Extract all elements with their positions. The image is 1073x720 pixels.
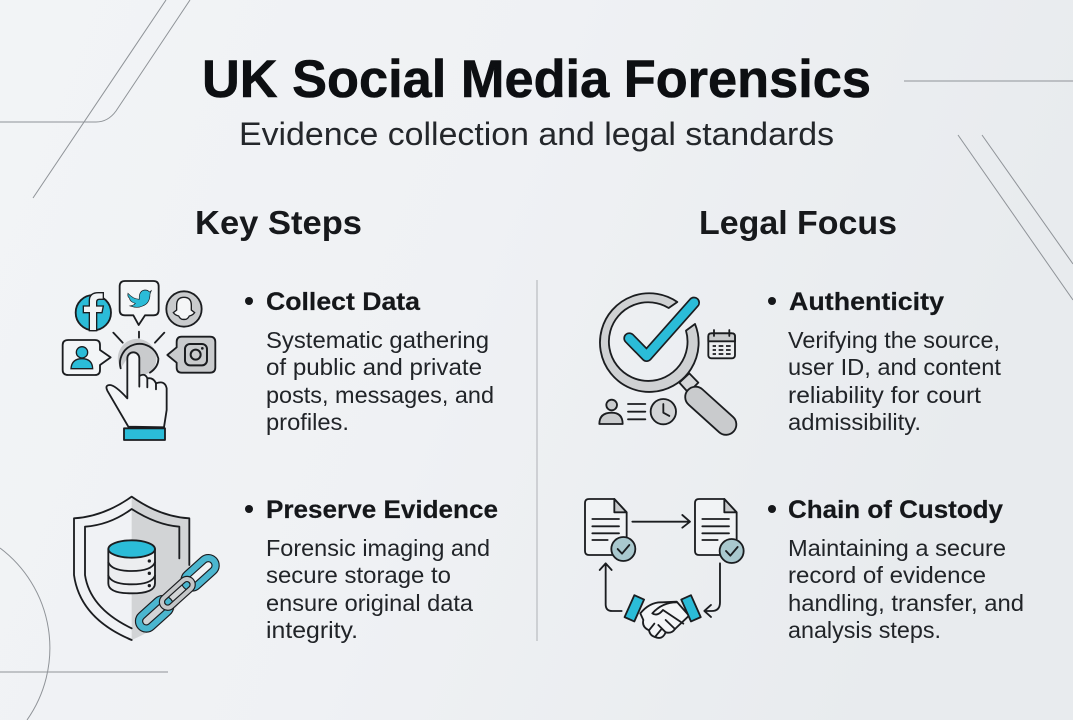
title: UK Social Media Forensics <box>202 50 871 109</box>
focus: authenticity: reliability for court <box>788 382 982 408</box>
step: collect data <box>245 288 494 435</box>
focus: authenticity: Authenticity <box>789 288 944 316</box>
focus: authenticity: Verifying the source, <box>788 327 1000 353</box>
focus: authenticity <box>768 288 1002 435</box>
step: preserve evidence: ensure original data <box>266 590 473 616</box>
step: preserve evidence <box>245 496 498 643</box>
focus: chain of custody: record of evidence <box>788 562 986 588</box>
focus: chain of custody: analysis steps. <box>788 617 941 643</box>
heading: key steps: Key Steps <box>195 204 362 241</box>
icon: shield with database and chain <box>74 497 219 640</box>
step: collect data: Collect Data <box>266 288 421 316</box>
step: preserve evidence: Preserve Evidence <box>266 496 498 524</box>
subtitle: Evidence collection and legal standards <box>239 116 834 152</box>
heading: legal focus: Legal Focus <box>699 204 897 241</box>
focus: chain of custody: handling, transfer, and <box>788 590 1024 616</box>
icon: social media collection <box>63 281 215 440</box>
step: preserve evidence: Forensic imaging and <box>266 535 490 561</box>
step: collect data: Systematic gathering <box>266 327 489 353</box>
step: collect data: profiles. <box>266 409 349 435</box>
focus: authenticity: admissibility. <box>788 409 921 435</box>
focus: authenticity: user ID, and content <box>788 354 1002 380</box>
icon: chain of custody <box>585 499 744 638</box>
focus: chain of custody: Maintaining a secure <box>788 535 1006 561</box>
step: preserve evidence: integrity. <box>266 617 358 643</box>
icon: magnifier with check <box>599 293 741 439</box>
focus: chain of custody: Chain of Custody <box>788 496 1003 524</box>
step: collect data: of public and private <box>266 354 482 380</box>
step: collect data: posts, messages, and <box>266 382 494 408</box>
focus: chain of custody <box>768 496 1024 643</box>
step: preserve evidence: secure storage to <box>266 562 451 588</box>
